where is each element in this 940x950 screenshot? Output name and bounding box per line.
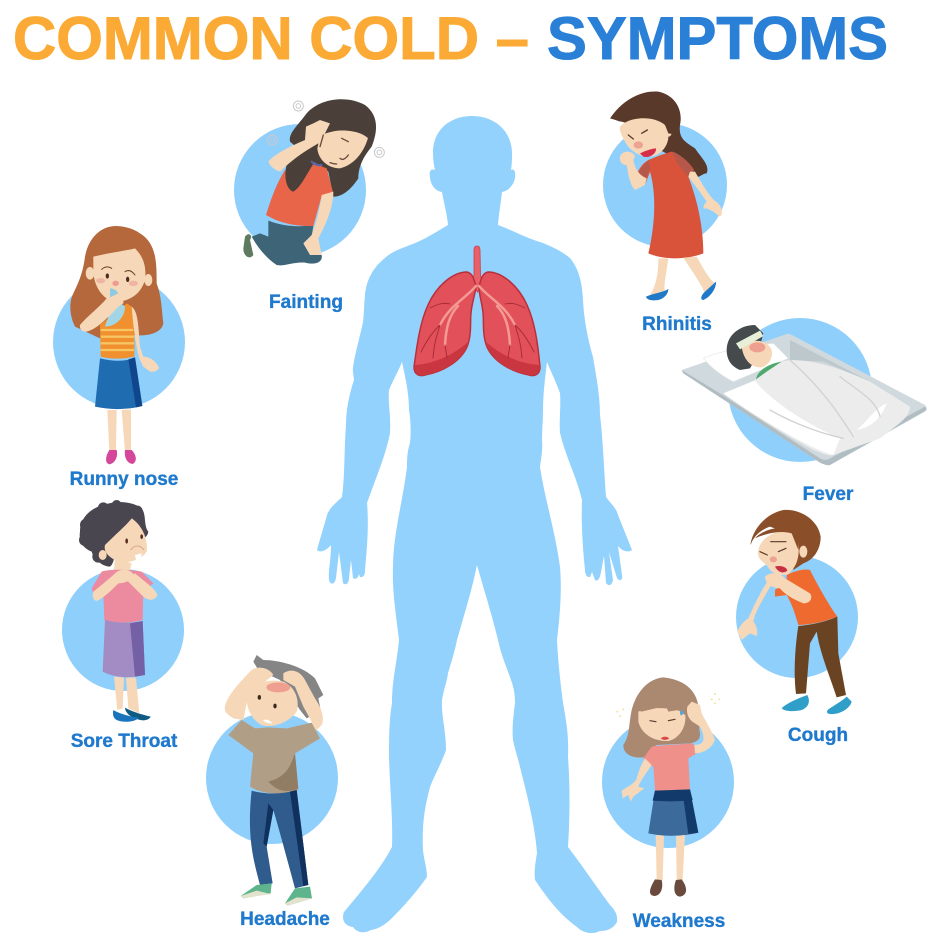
dizzy sparkles xyxy=(616,693,720,717)
title: SYMPTOMS xyxy=(547,5,888,72)
trachea xyxy=(472,246,483,292)
bed mattress xyxy=(682,334,927,465)
circle xyxy=(736,556,858,678)
label: Headache xyxy=(240,909,330,930)
right lung xyxy=(479,272,540,376)
panel: headache xyxy=(206,655,338,930)
title xyxy=(13,5,888,72)
circle xyxy=(602,716,734,848)
label: Cough xyxy=(788,725,848,746)
bed and patient xyxy=(682,325,927,465)
figure: kneeling woman xyxy=(243,99,384,265)
lung shading xyxy=(415,342,539,376)
figure: man holding head xyxy=(225,655,323,906)
circle xyxy=(728,318,872,462)
figure: woman holding throat xyxy=(79,500,157,722)
label: Fainting xyxy=(269,292,343,313)
figure: weak girl xyxy=(616,677,720,897)
panel: sore throat xyxy=(62,500,184,752)
label: Fever xyxy=(803,484,854,505)
lungs xyxy=(414,246,540,376)
circle xyxy=(62,569,184,691)
circle xyxy=(603,123,727,247)
title: COMMON COLD – xyxy=(13,5,529,72)
blanket xyxy=(723,360,910,455)
figure: girl in red dress xyxy=(610,91,722,300)
body silhouette xyxy=(317,116,632,933)
label: Rhinitis xyxy=(642,314,712,335)
circle xyxy=(206,712,338,844)
panel: runny nose xyxy=(53,226,185,490)
label: Runny nose xyxy=(70,469,178,490)
pillow xyxy=(703,343,788,382)
label: Sore Throat xyxy=(71,731,178,752)
circle xyxy=(53,276,185,408)
bronchi xyxy=(440,286,515,345)
panel: weakness xyxy=(602,677,734,932)
figure: girl with tissue xyxy=(70,226,163,464)
panel: cough xyxy=(736,510,858,746)
lung veins xyxy=(421,303,534,358)
figure: coughing boy xyxy=(737,510,852,714)
label: Weakness xyxy=(633,911,725,932)
panel: fainting xyxy=(234,99,384,313)
panel: fever xyxy=(682,318,927,505)
dizzy swirls xyxy=(267,101,384,157)
panel: rhinitis xyxy=(603,91,727,335)
circle xyxy=(234,124,366,256)
left lung xyxy=(414,272,476,376)
patient head xyxy=(727,325,782,379)
